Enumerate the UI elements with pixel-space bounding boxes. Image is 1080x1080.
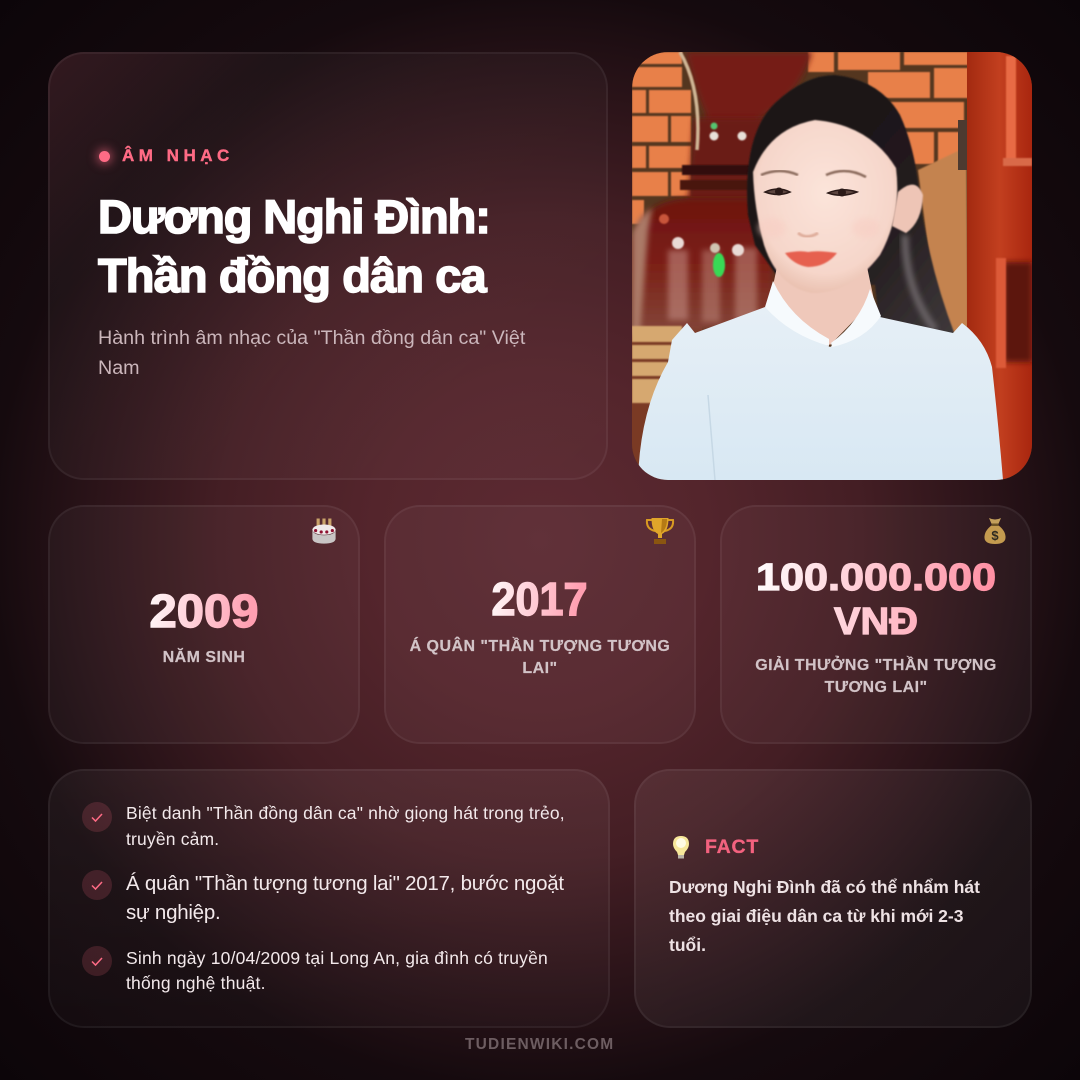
ear — [892, 185, 923, 233]
wooden slats — [917, 150, 967, 332]
collar right — [831, 289, 881, 347]
eyes — [765, 189, 790, 194]
bullet 2 — [126, 872, 564, 924]
stat label: NĂM SINH — [163, 648, 245, 666]
heading: Dương Nghi Đình: — [98, 190, 490, 243]
bullet 1: Biệt danh "Thần đồng dân ca" nhờ giọng hát trong trẻo, — [126, 803, 565, 823]
hair — [747, 75, 955, 335]
woven basket — [632, 326, 682, 403]
stat label: TƯƠNG LAI" — [824, 678, 928, 696]
stat label: LAI" — [522, 660, 558, 676]
panel: title card — [48, 52, 608, 480]
bullet 1 — [126, 803, 565, 849]
lower background behind figure — [632, 326, 702, 480]
stat label — [410, 636, 670, 676]
kicker dot — [98, 150, 110, 162]
panel: stat birth year — [48, 505, 360, 744]
stat label — [755, 656, 997, 696]
fact text — [669, 877, 980, 955]
subtitle: Hành trình âm nhạc của "Thần đồng dân ca" Việt — [98, 327, 525, 349]
photo: portrait of singer in white ao dai — [632, 52, 1032, 480]
nose — [798, 233, 818, 236]
heading: Thần đồng dân ca — [98, 249, 486, 302]
stat number: VNĐ — [834, 601, 918, 643]
bricks wall — [632, 52, 1032, 480]
check icon 1 — [82, 802, 112, 832]
stat label: Á QUÂN "THẦN TƯỢNG TƯƠNG — [410, 638, 670, 654]
face — [753, 120, 897, 293]
panel: stat prize — [720, 505, 1032, 744]
bullet 3: Sinh ngày 10/04/2009 tại Long An, gia đình có truyền — [126, 948, 548, 968]
footer credit: TUDIENWIKI.COM — [465, 1036, 614, 1053]
red vase — [632, 52, 812, 335]
subtitle — [98, 327, 526, 378]
stat number — [756, 557, 996, 643]
heading — [98, 190, 490, 303]
lips — [785, 251, 837, 267]
cheeks — [754, 220, 762, 240]
icon: money bag — [984, 518, 1006, 544]
green light — [713, 253, 725, 277]
bullet 3 — [126, 948, 548, 993]
check icon 2 — [82, 870, 112, 900]
icon: birthday cake — [312, 518, 336, 544]
fact text: Dương Nghi Đình đã có thể nhẩm hát — [669, 877, 980, 897]
bullet 2: Á quân "Thần tượng tương lai" 2017, bước ngoặt — [126, 872, 564, 895]
ao dai shirt — [638, 307, 1003, 480]
icon: money bag: $ — [991, 528, 999, 543]
red door — [967, 52, 1032, 480]
collar left — [765, 281, 829, 346]
panel: key points list — [48, 769, 610, 1028]
eyebrows — [761, 171, 798, 175]
icon: trophy — [646, 518, 674, 544]
bullet 1: truyền cảm. — [126, 829, 219, 849]
fact label: FACT — [705, 836, 759, 858]
bullet 3: thống nghệ thuật. — [126, 973, 266, 993]
check icon 3 — [82, 946, 112, 976]
fact text: tuổi. — [669, 935, 706, 955]
kicker label: ÂM NHẠC — [122, 146, 234, 165]
stat number: 2009 — [150, 585, 258, 637]
fact text: theo giai điệu dân ca từ khi mới 2-3 — [669, 906, 963, 926]
icon: light bulb — [673, 836, 689, 858]
neck — [774, 268, 874, 345]
hair highlight — [905, 235, 935, 330]
stat label: GIẢI THƯỞNG "THẦN TƯỢNG — [755, 656, 997, 674]
subtitle: Nam — [98, 356, 140, 378]
bullet 2: sự nghiệp. — [126, 901, 220, 924]
panel: fact — [634, 769, 1032, 1028]
panel: stat runner-up — [384, 505, 696, 744]
stat number: 100.000.000 — [756, 557, 996, 599]
stat number: 2017 — [492, 573, 588, 625]
